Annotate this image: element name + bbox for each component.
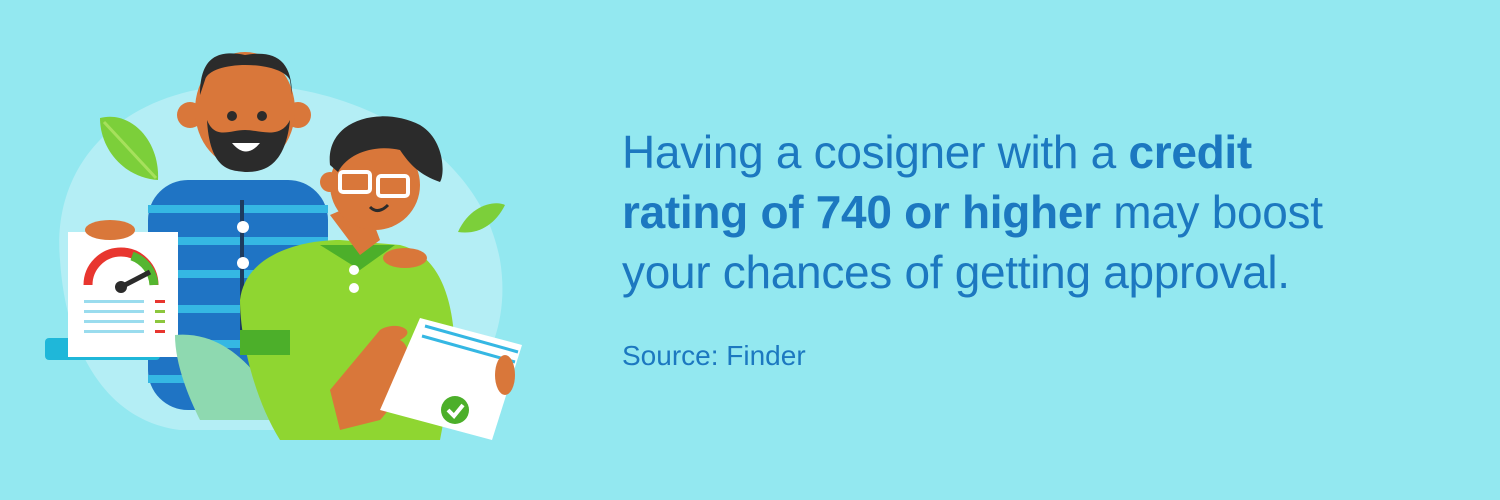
illustration: two men with credit documents — [45, 52, 522, 440]
main statement text: rating of 740 or higher may boost — [622, 186, 1323, 238]
credit score report with gauge — [45, 220, 178, 360]
approved document with checkmark — [380, 318, 522, 440]
leaf right — [458, 203, 505, 233]
main statement text — [622, 126, 1323, 298]
leaf left — [100, 117, 158, 180]
man 2: man with glasses — [240, 116, 455, 440]
man 1: bearded man — [148, 52, 328, 410]
big leaf — [175, 335, 285, 420]
background blob — [59, 85, 502, 430]
main statement text: your chances of getting approval. — [622, 246, 1290, 298]
main statement text: Having a cosigner with a credit — [622, 126, 1252, 178]
source note: Source: Finder — [622, 340, 806, 371]
